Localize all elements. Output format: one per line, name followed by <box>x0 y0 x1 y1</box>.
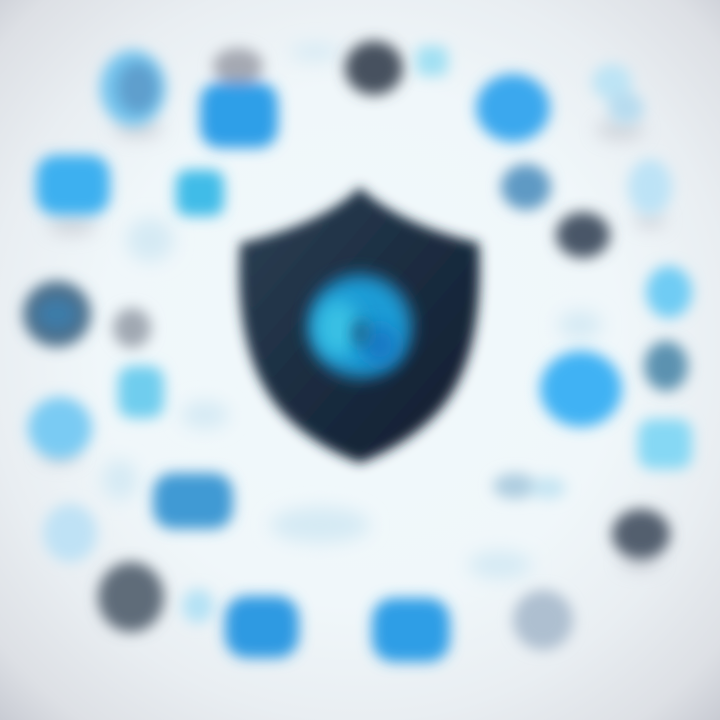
icon: top-right blue badge <box>476 74 550 142</box>
icon: bottom small cyan <box>182 589 214 623</box>
icon: bottom blue card 2 <box>372 598 450 662</box>
icon: lower right pale glyph <box>493 473 566 499</box>
icon: top-left globe <box>100 50 166 126</box>
icon: right small cyan <box>646 266 692 318</box>
shield <box>239 187 480 463</box>
icon: left slate card <box>23 281 91 347</box>
icon: lower left blue card <box>153 473 233 529</box>
icon: left blue card <box>36 155 110 215</box>
icon: faint connecting marks <box>102 44 602 579</box>
icon: padlock <box>200 48 278 148</box>
icon: top-right pale wifi <box>592 64 644 124</box>
icon: right pale panel <box>628 159 672 215</box>
icon: bottom blue card 1 <box>225 596 299 658</box>
icon: large right blue circle <box>540 351 622 427</box>
icon: small grey gear <box>113 308 151 348</box>
icon: small top cyan square <box>416 46 448 76</box>
icon: small cyan card <box>176 170 224 216</box>
globe emblem <box>298 264 422 388</box>
icon: soft grey shadows under icons <box>40 118 666 570</box>
icon: right dark lock <box>556 212 610 258</box>
icon: left pale blue circle <box>28 397 92 459</box>
icon: bottom left dark circle <box>98 562 164 632</box>
icon: left cyan tile <box>118 366 164 418</box>
icon: top dark circle <box>345 41 403 95</box>
icon: lower right dark circle <box>612 509 670 559</box>
icon: right slate <box>644 341 688 391</box>
icon: lower left pale circle <box>43 504 97 562</box>
icon: bottom right grey tile <box>513 590 573 650</box>
icon: right slate small <box>501 164 551 210</box>
icon: right pale cyan tile <box>638 419 692 469</box>
